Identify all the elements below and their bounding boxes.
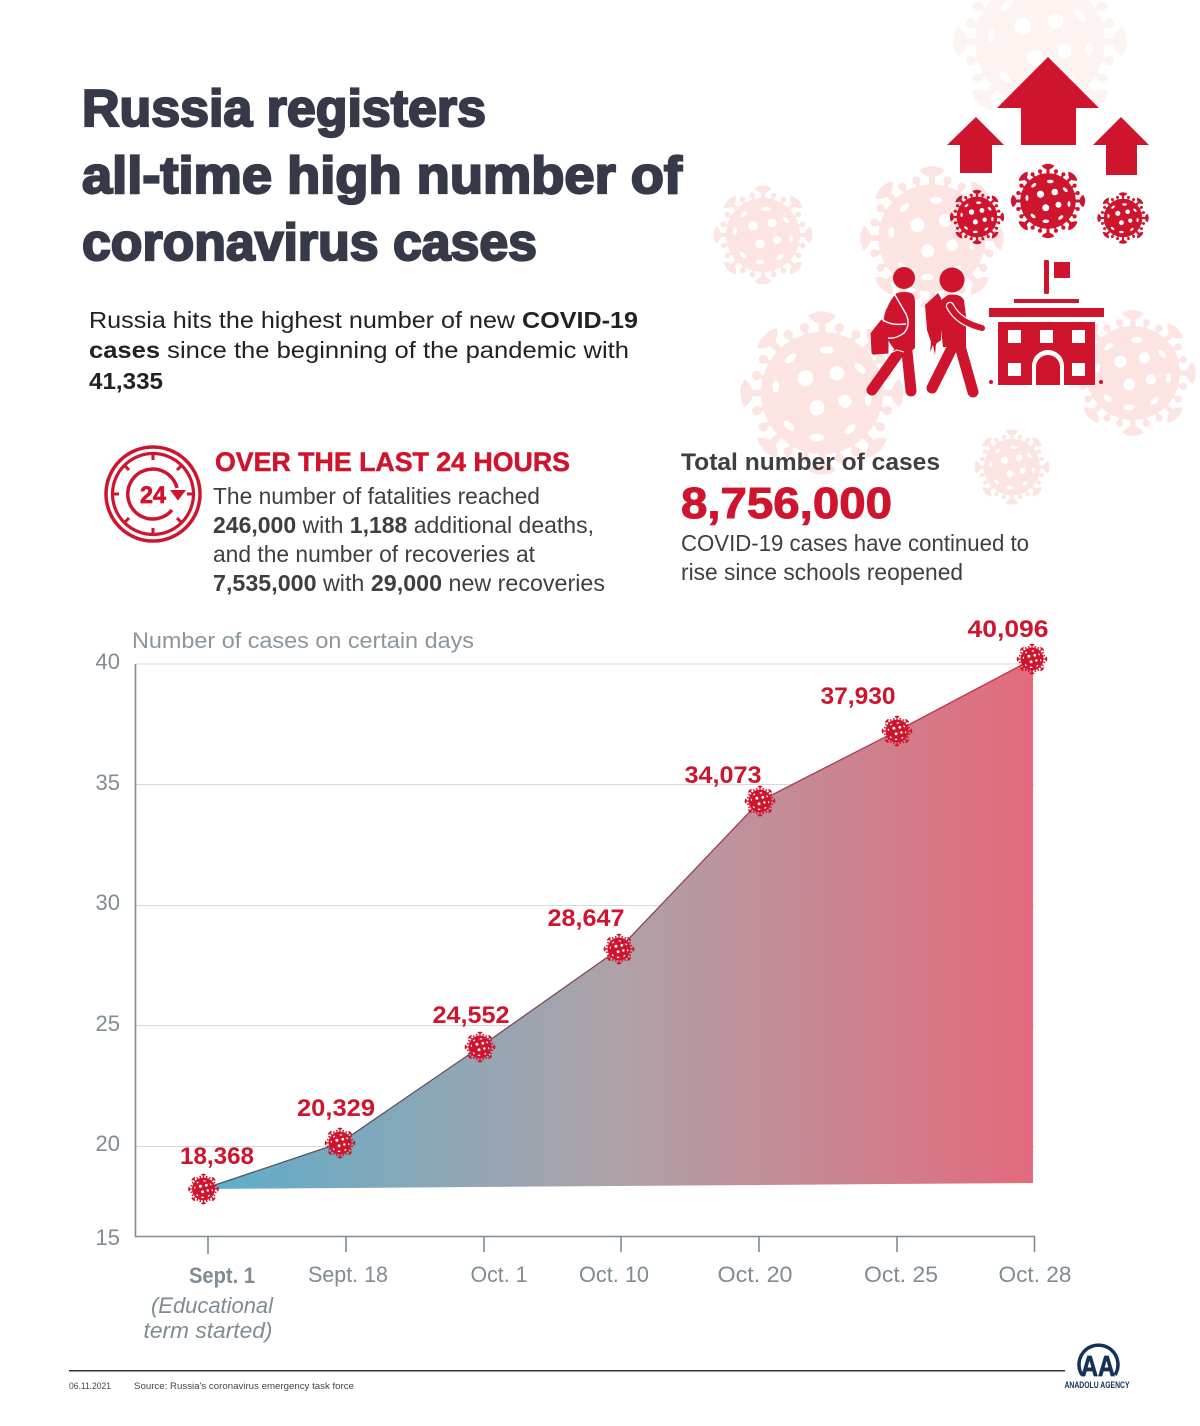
y-axis labels: 30 <box>96 890 120 915</box>
x-axis labels: Oct. 20 <box>718 1262 792 1287</box>
total number of cases text block: Total number of cases <box>681 449 940 476</box>
x-axis labels: Oct. 10 <box>579 1262 649 1287</box>
icon: 24 hour clock <box>106 447 200 541</box>
intro text <box>89 307 638 394</box>
data value labels: 18,368 <box>180 1143 254 1170</box>
data value labels <box>180 616 1048 1170</box>
footer line <box>69 1370 1065 1372</box>
logo: Anadolu Agency: ANADOLU AGENCY <box>1064 1380 1130 1391</box>
intro text: cases since the beginning of the pandemic with <box>89 337 629 363</box>
x-axis labels <box>144 1262 1072 1343</box>
x-axis labels: Sept. 18 <box>308 1262 388 1287</box>
data value labels: 37,930 <box>820 683 896 710</box>
y-axis labels: 35 <box>96 770 120 795</box>
total cases number: 8,756,000 <box>681 479 892 528</box>
logo: Anadolu Agency <box>1064 1345 1130 1391</box>
total number of cases text block: rise since schools reopened <box>681 559 963 585</box>
data value labels: 34,073 <box>684 762 762 789</box>
x-axis labels: (Educational <box>151 1293 274 1318</box>
case curve line <box>203 659 1033 1189</box>
icon: students walking <box>870 267 982 392</box>
x-axis labels: Oct. 25 <box>864 1262 938 1287</box>
x-axis labels: Oct. 1 <box>470 1262 528 1287</box>
x-axis labels: Oct. 28 <box>998 1262 1072 1287</box>
over the last 24 hours text block <box>213 447 605 596</box>
over the last 24 hours text block: 246,000 with 1,188 additional deaths, <box>213 512 594 538</box>
chart title: Number of cases on certain days <box>132 628 474 653</box>
over the last 24 hours text block: 7,535,000 with 29,000 new recoveries <box>213 570 605 596</box>
area under the curve <box>203 659 1033 1189</box>
icon: school building <box>989 260 1104 385</box>
icon: 24 hour clock: 24 <box>140 482 167 509</box>
line chart: number of cases on certain days <box>96 616 1072 1343</box>
intro text: Russia hits the highest number of new COVID-19 <box>89 307 638 333</box>
footer date and source: 06.11.2021 <box>69 1381 111 1391</box>
title <box>82 80 683 272</box>
y-axis labels: 25 <box>96 1011 120 1036</box>
x-axis labels: Sept. 1 <box>189 1263 255 1288</box>
icon: red viruses <box>948 162 1150 246</box>
y-axis labels: 15 <box>96 1225 120 1250</box>
chart axes <box>136 664 1035 1254</box>
title: all-time high number of <box>82 147 683 205</box>
y-axis labels <box>96 649 120 1250</box>
y-axis labels: 20 <box>96 1131 120 1156</box>
data value labels: 28,647 <box>548 905 624 932</box>
data value labels: 20,329 <box>297 1095 375 1122</box>
total number of cases text block <box>681 449 1029 585</box>
x-axis labels: term started) <box>144 1318 272 1343</box>
heading: over the last 24 hours: OVER THE LAST 24 HOURS <box>215 447 570 477</box>
data value labels: 40,096 <box>968 616 1048 643</box>
over the last 24 hours text block: The number of fatalities reached <box>213 483 540 509</box>
title: coronavirus cases <box>82 214 537 272</box>
icon: rising arrows <box>947 57 1149 175</box>
over the last 24 hours text block: and the number of recoveries at <box>213 541 536 567</box>
background virus pattern <box>711 0 1199 507</box>
title: Russia registers <box>82 80 486 138</box>
footer date and source: Source: Russia's coronavirus emergency task force <box>134 1381 354 1391</box>
student one <box>870 267 915 391</box>
student two <box>925 268 982 392</box>
data value labels: 24,552 <box>432 1002 510 1029</box>
total number of cases text block: COVID-19 cases have continued to <box>681 530 1029 556</box>
data markers <box>187 643 1048 1205</box>
logo: Anadolu Agency: AA <box>1081 1351 1115 1383</box>
intro text: 41,335 <box>89 368 163 394</box>
y-axis labels: 40 <box>96 649 120 674</box>
